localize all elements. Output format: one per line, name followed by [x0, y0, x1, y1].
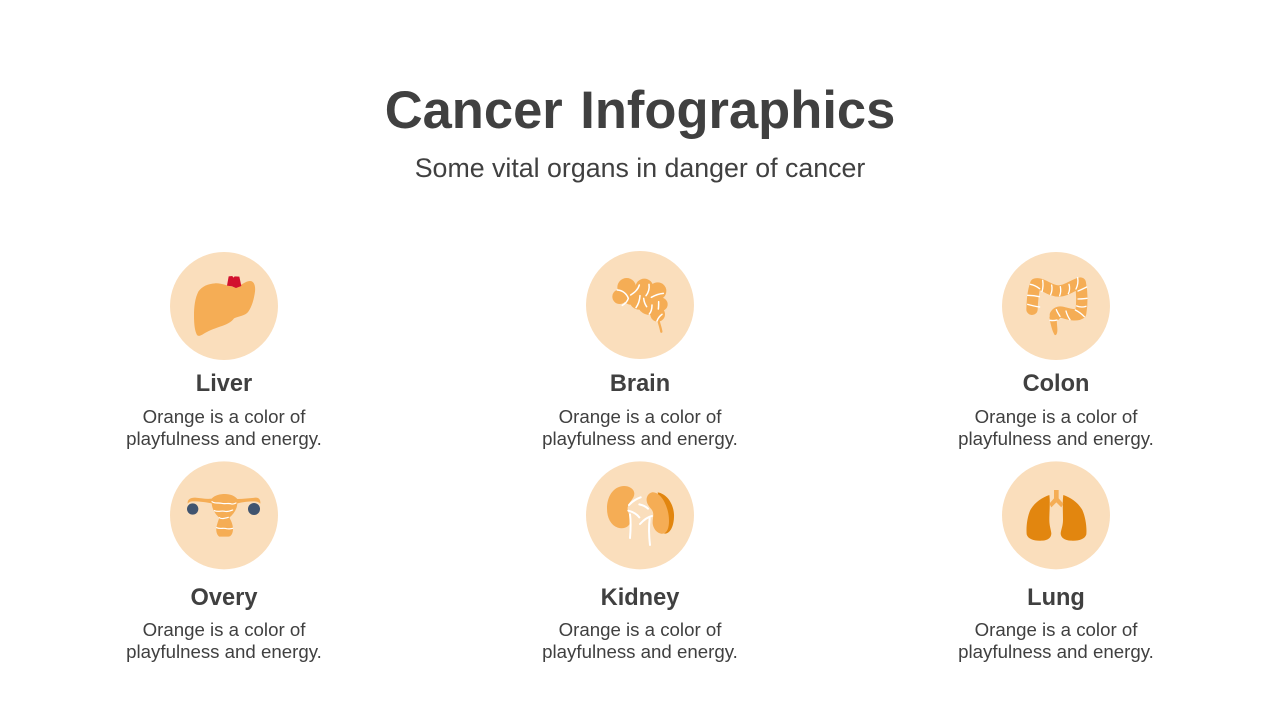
- description: liver: Orange is a color of: [143, 406, 305, 427]
- card text: lung: [958, 585, 1154, 662]
- icon: liver: [170, 252, 278, 360]
- description: liver: playfulness and energy.: [126, 428, 322, 449]
- heading: brain: Brain: [610, 371, 670, 397]
- heading: colon: Colon: [1023, 371, 1089, 397]
- card text: colon: [958, 371, 1154, 449]
- description: brain: playfulness and energy.: [542, 428, 738, 449]
- title: Cancer Infographics: [385, 81, 895, 140]
- card text: ovary: [126, 585, 322, 662]
- description: lung: [958, 619, 1154, 662]
- description: colon: Orange is a color of: [975, 406, 1137, 427]
- description: ovary: [126, 619, 322, 662]
- heading: lung: Lung: [1027, 585, 1085, 611]
- subtitle: Some vital organs in danger of cancer: [415, 153, 865, 183]
- card text: kidney: [542, 585, 738, 662]
- heading: kidney: Kidney: [601, 585, 679, 611]
- description: colon: playfulness and energy.: [958, 428, 1154, 449]
- icon: colon: [1002, 252, 1110, 360]
- description: lung: Orange is a color of: [975, 619, 1137, 640]
- description: kidney: Orange is a color of: [559, 619, 721, 640]
- icon: ovary: [170, 461, 278, 569]
- icon: kidney: [586, 461, 694, 569]
- description: ovary: Orange is a color of: [143, 619, 305, 640]
- description: kidney: [542, 619, 738, 662]
- card text: brain: [542, 371, 738, 449]
- description: lung: playfulness and energy.: [958, 641, 1154, 662]
- description: liver: [126, 406, 322, 449]
- description: brain: [542, 406, 738, 449]
- icon: lung: [1002, 461, 1110, 569]
- heading: liver: Liver: [196, 371, 252, 397]
- icon: brain: [586, 251, 694, 359]
- description: colon: [958, 406, 1154, 449]
- description: brain: Orange is a color of: [559, 406, 721, 427]
- description: kidney: playfulness and energy.: [542, 641, 738, 662]
- description: ovary: playfulness and energy.: [126, 641, 322, 662]
- card text: liver: [126, 371, 322, 449]
- heading: ovary: Overy: [191, 585, 257, 611]
